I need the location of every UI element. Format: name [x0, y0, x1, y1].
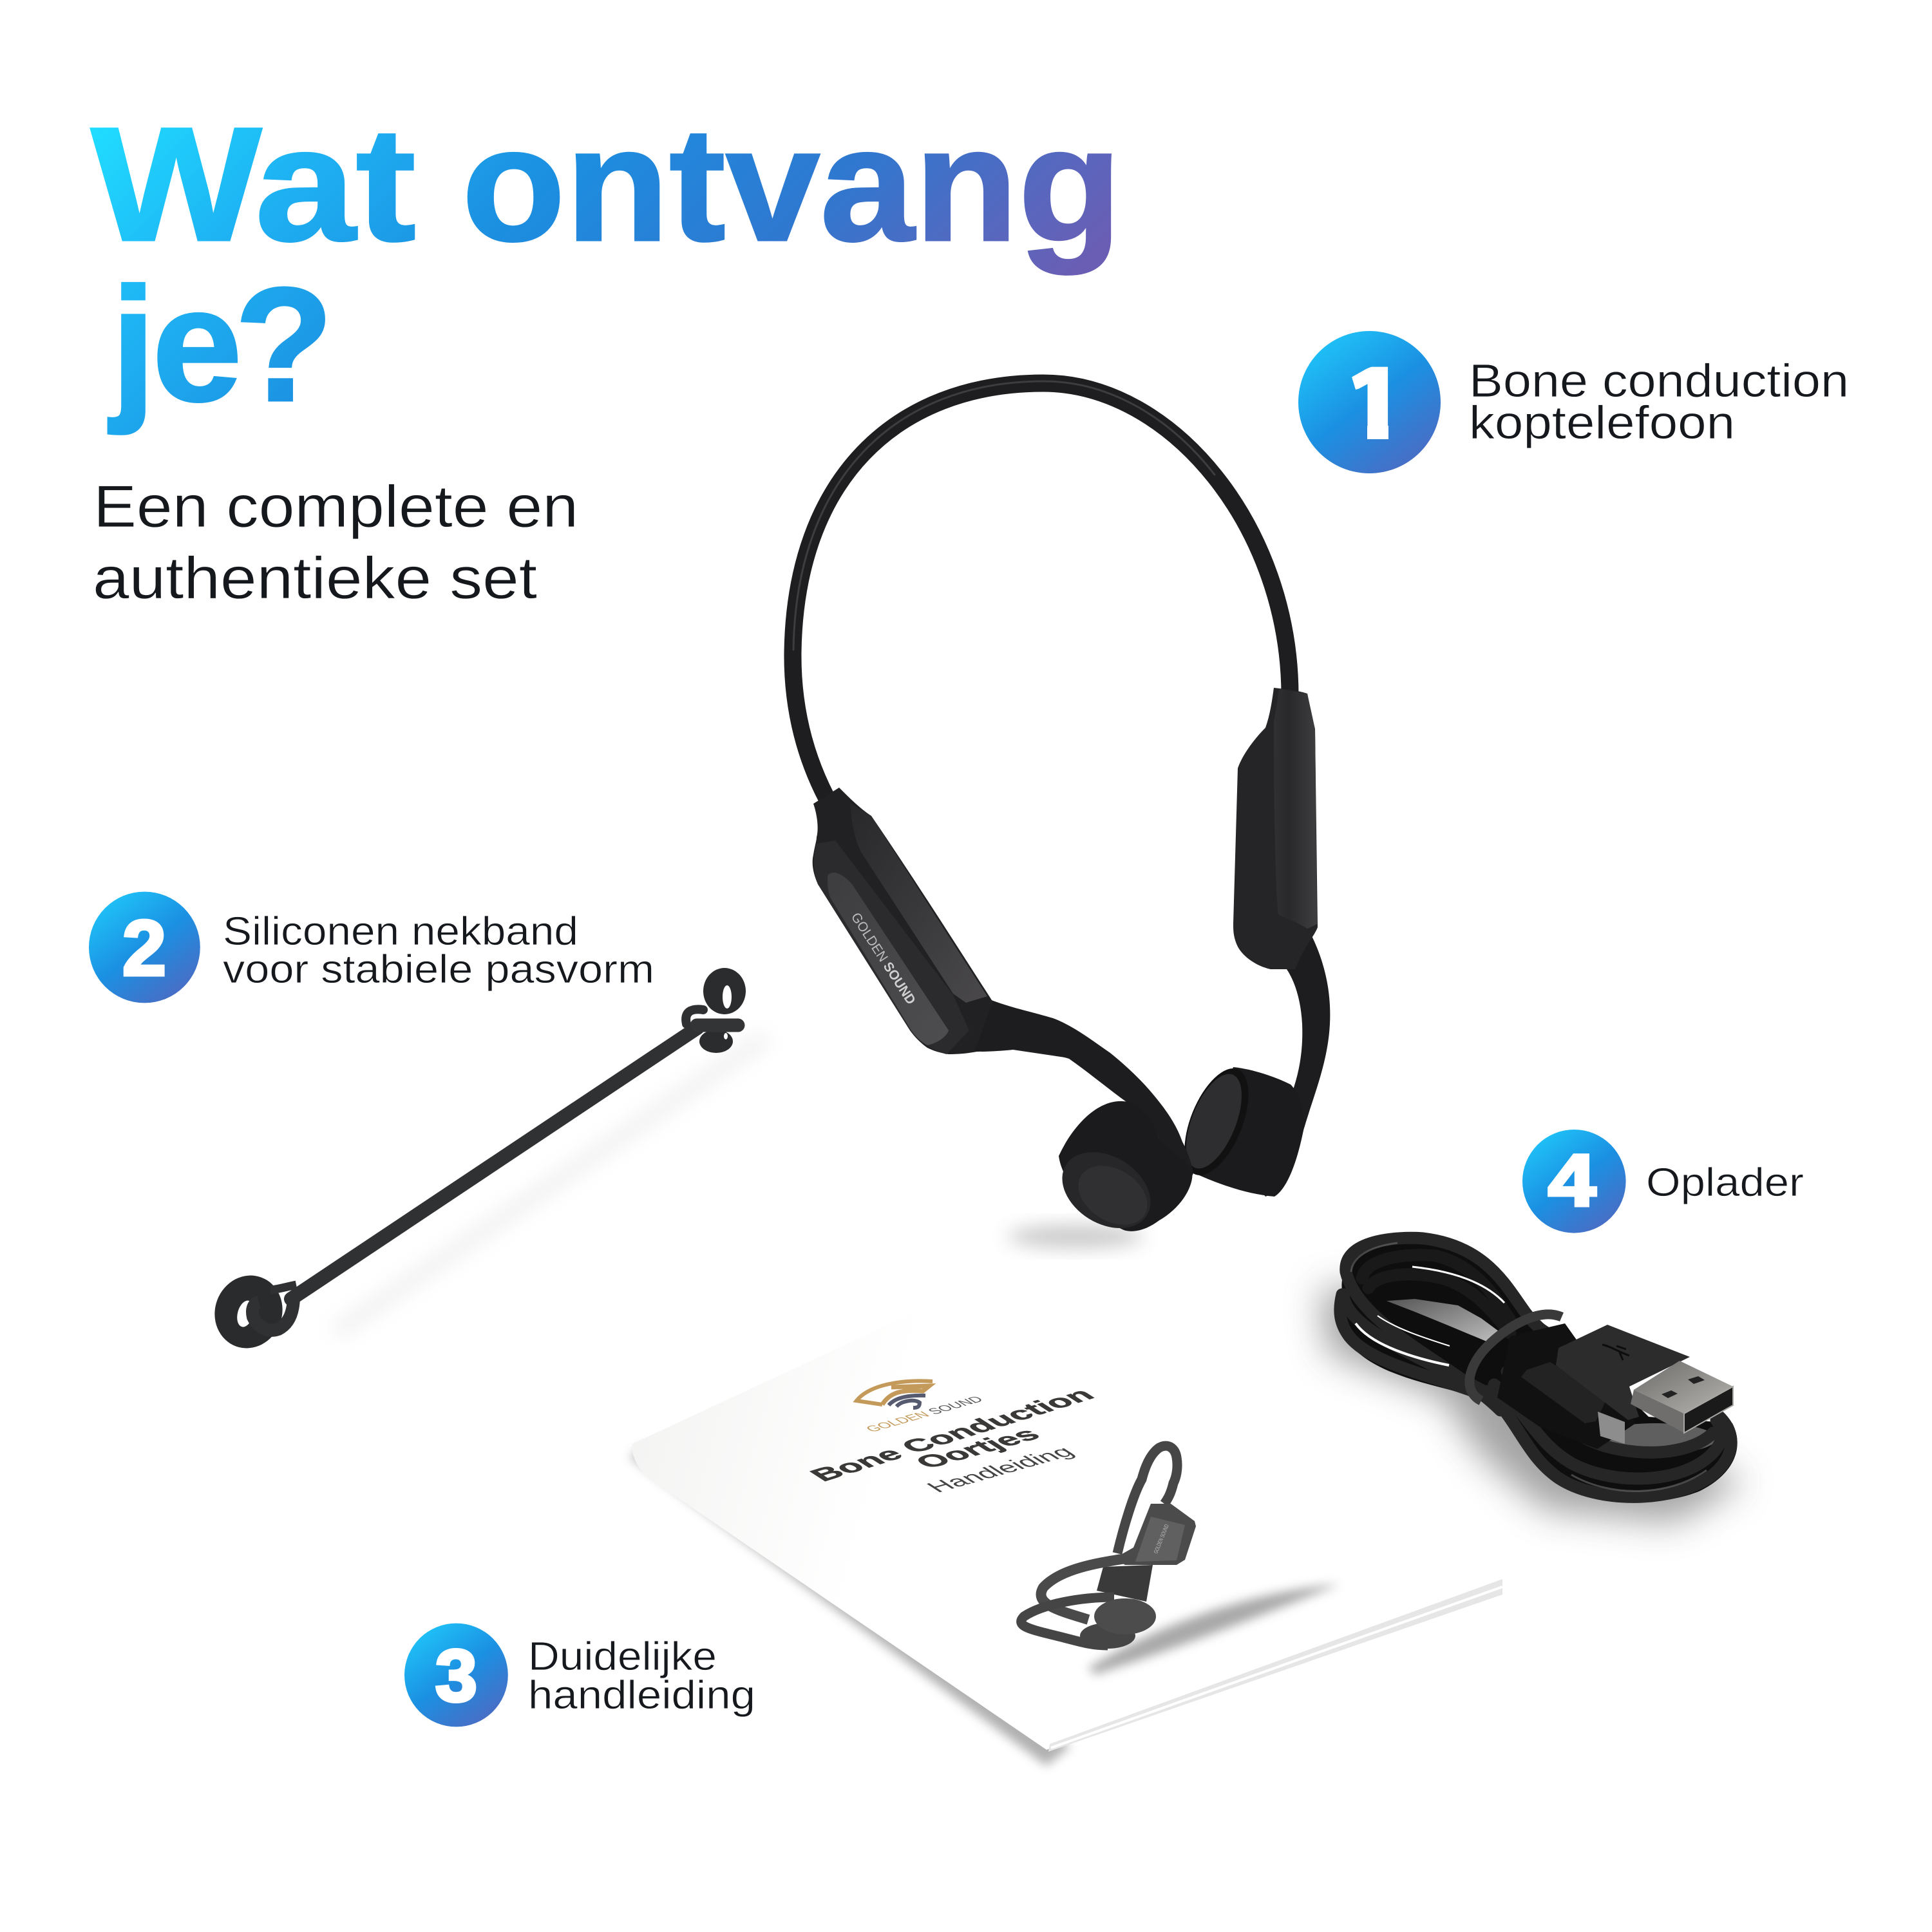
floor patch inside upper loop [1387, 1299, 1499, 1344]
cable underlay [1338, 1235, 1738, 1502]
left module [813, 788, 1069, 1058]
subtitle: Een complete en [93, 474, 578, 540]
headset [793, 381, 1330, 1244]
callout 1: 1 [1343, 348, 1407, 460]
callout 1: Bone conduction [1469, 355, 1849, 407]
title [91, 94, 1122, 435]
callout 2 [89, 892, 654, 1003]
callout 1 [1298, 331, 1849, 473]
manual [632, 1294, 1502, 1752]
right earpiece [1171, 1059, 1303, 1197]
callout 2: voor stabiele pasvorm [223, 947, 654, 992]
callout 3: Duidelijke [528, 1634, 717, 1679]
shadow: headset [1008, 1225, 1143, 1248]
page edges [1048, 1579, 1502, 1752]
neckband [205, 968, 746, 1358]
cable tie [1470, 1314, 1562, 1401]
callout 2: 2 [122, 904, 166, 992]
charging cable [1338, 1235, 1738, 1502]
highlights on cable [1351, 1243, 1707, 1491]
callout 3 [404, 1624, 755, 1727]
manual title: Oortjes [908, 1424, 1047, 1472]
callout 1: koptelefoon [1469, 397, 1735, 449]
small connector [1521, 1362, 1625, 1444]
title: je? [108, 254, 334, 435]
callout 4: 4 [1548, 1140, 1596, 1222]
callout 3: 3 [435, 1635, 477, 1717]
logo [857, 1381, 987, 1434]
manual headset image: GOLDEN SOUND [1153, 1523, 1170, 1555]
callout 4: Oplader [1646, 1160, 1804, 1205]
manual title [803, 1385, 1101, 1495]
coils [1340, 1238, 1731, 1497]
shadow: manual [630, 1446, 1070, 1766]
subtitle [93, 474, 578, 611]
white gaps between coils [1356, 1267, 1504, 1365]
logo wordmark: GOLDEN SOUND [863, 1395, 987, 1434]
manual title: Bone Conduction [803, 1385, 1101, 1485]
manual shadow stripe [1088, 1584, 1340, 1674]
manual headset image [1021, 1446, 1196, 1649]
shadow: cable [1320, 1288, 1745, 1523]
lower loop [205, 1266, 296, 1358]
callout 2: Siliconen nekband [223, 909, 578, 954]
title: ontvang [462, 94, 1122, 275]
brand text on module: GOLDEN SOUND [848, 910, 918, 1007]
subtitle: authentieke set [93, 545, 537, 611]
cord bundle behind plugs [1497, 1323, 1636, 1449]
title: Wat [91, 94, 416, 275]
callout 3: handleiding [528, 1673, 755, 1718]
callout 4 [1522, 1130, 1804, 1233]
shadow: neckband [335, 1037, 766, 1333]
headband [793, 381, 1290, 797]
left earpiece [1048, 1101, 1193, 1244]
right arm and module [1233, 688, 1330, 1197]
ground inside lower loop [1594, 1423, 1716, 1454]
USB plug [1556, 1325, 1733, 1433]
cover page [632, 1294, 1502, 1750]
manual title: Handleiding [921, 1443, 1080, 1495]
left arm [974, 1001, 1193, 1188]
upper loop and knot [686, 968, 746, 1053]
cord [291, 1028, 697, 1299]
